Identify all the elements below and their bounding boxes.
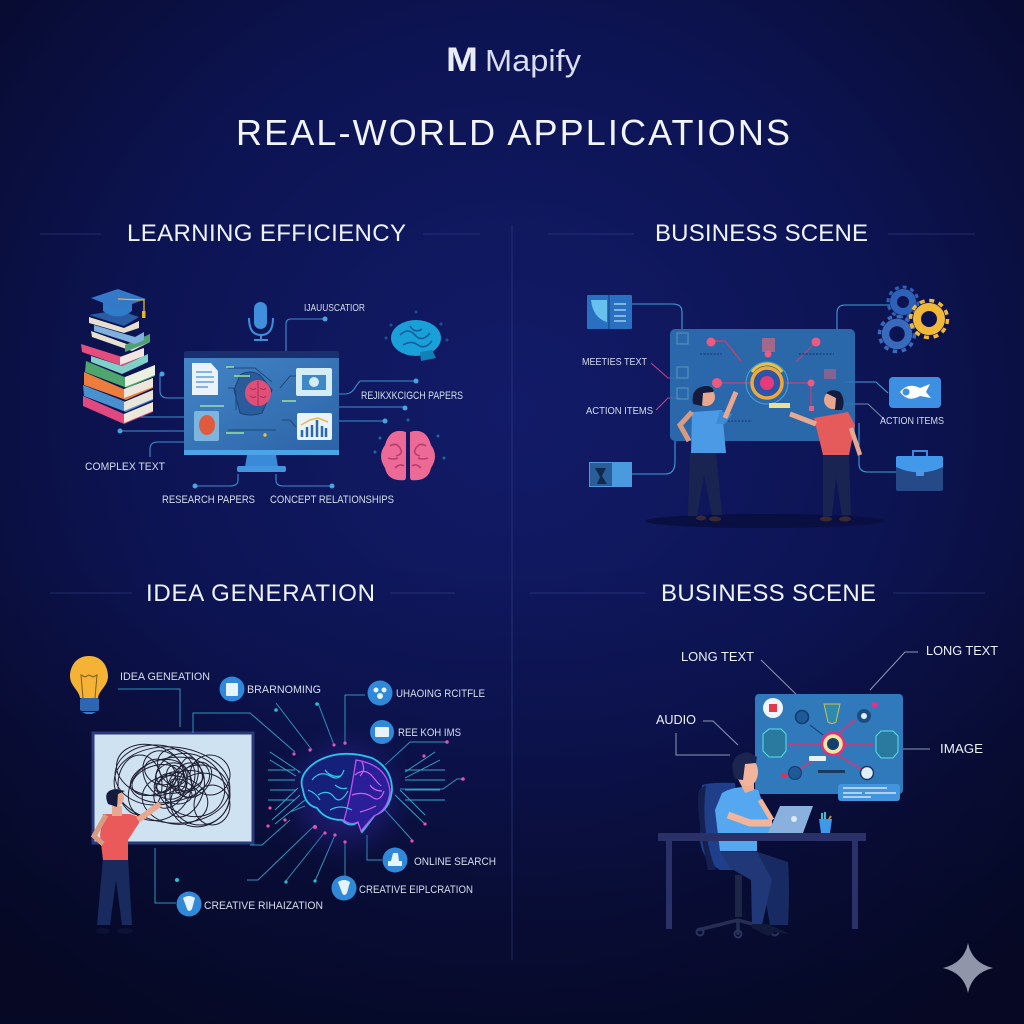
panel: idea generation: ONLINE SEARCH xyxy=(414,856,496,868)
icon: fish card xyxy=(889,377,941,408)
badge glyphs xyxy=(183,683,402,911)
icon: blue brain xyxy=(384,310,448,361)
logo xyxy=(446,41,582,79)
chair xyxy=(696,783,778,938)
panel: idea generation: CREATIVE EIPLCRATION xyxy=(359,884,473,896)
panel: idea generation: REE KOH IMS xyxy=(398,727,461,739)
connector lines xyxy=(120,319,416,486)
panel: idea generation: UHAOING RCITFLE xyxy=(396,688,485,700)
logo: Mapify xyxy=(485,43,582,78)
labels: REJIKXKCIGCH PAPERS xyxy=(361,390,463,402)
screen: central brain xyxy=(234,372,272,415)
connector lines xyxy=(631,304,896,474)
panel: idea generation: CREATIVE RIHAIZATION xyxy=(204,900,323,912)
network diagram xyxy=(711,341,816,416)
icon: image card xyxy=(589,462,632,487)
center divider xyxy=(40,225,985,960)
panel: learning efficiency xyxy=(81,220,463,506)
icon: pink brain xyxy=(374,418,446,480)
screen: image card top right xyxy=(296,368,332,396)
icon: book card xyxy=(587,295,632,329)
person: drawing xyxy=(94,789,160,934)
icon badges xyxy=(176,676,408,916)
person: right xyxy=(790,390,860,522)
panel: idea generation: BRARNOMING xyxy=(247,684,321,696)
connector dots xyxy=(118,316,418,488)
desk xyxy=(658,833,866,929)
holographic board xyxy=(670,329,855,441)
panel: learning efficiency: COMPLEX TEXT xyxy=(85,461,165,473)
callout lines xyxy=(676,652,930,755)
screen: document xyxy=(192,363,218,395)
icon: sparkle xyxy=(943,943,993,993)
screen: chart card xyxy=(297,413,332,440)
icon: briefcase xyxy=(896,451,943,491)
icon: microphone xyxy=(249,302,273,340)
title: REAL-WORLD APPLICATIONS xyxy=(236,112,790,153)
heading: business scene: BUSINESS SCENE xyxy=(655,220,868,247)
screen: portrait card xyxy=(194,411,219,441)
panel: business scene top: ACTION ITEMS xyxy=(586,405,653,417)
whiteboard with scribble xyxy=(93,733,253,843)
person: laptop user xyxy=(715,752,813,936)
floating screen xyxy=(755,694,903,801)
monitor xyxy=(184,351,339,472)
label: IJAUUSCATIOR xyxy=(304,303,365,314)
panel: idea generation xyxy=(70,580,496,934)
panel: business scene bottom xyxy=(656,580,998,938)
heading: idea generation: IDEA GENERATION xyxy=(146,580,375,607)
teal nodes xyxy=(175,702,319,884)
person: left xyxy=(680,386,736,522)
glowing brain xyxy=(268,723,445,867)
icon: book stack with graduation cap xyxy=(81,289,155,424)
connector lines xyxy=(118,689,463,903)
panel: business scene top: ACTION ITEMS xyxy=(880,415,944,427)
pink nodes xyxy=(266,740,465,844)
labels: IDEA GENEATION xyxy=(120,671,210,683)
panel: business scene bottom: IMAGE xyxy=(940,741,983,756)
icon: light bulb xyxy=(70,656,108,714)
panel: business scene top xyxy=(582,220,948,528)
pen cup xyxy=(819,812,832,833)
screen: links xyxy=(228,368,296,430)
icon: gears xyxy=(880,287,948,352)
heading: learning efficiency: LEARNING EFFICIENCY xyxy=(127,220,406,247)
panel: learning efficiency: RESEARCH PAPERS xyxy=(162,494,255,506)
heading: business scene: BUSINESS SCENE xyxy=(661,580,876,607)
labels: MEETIES TEXT xyxy=(582,356,648,368)
panel: learning efficiency: CONCEPT RELATIONSHIPS xyxy=(270,494,394,506)
labels: LONG TEXT xyxy=(681,649,754,664)
panel: business scene bottom: LONG TEXT xyxy=(926,643,998,658)
panel: business scene bottom: AUDIO xyxy=(656,712,696,727)
floor shadow xyxy=(645,514,885,528)
logo: M xyxy=(446,41,478,79)
